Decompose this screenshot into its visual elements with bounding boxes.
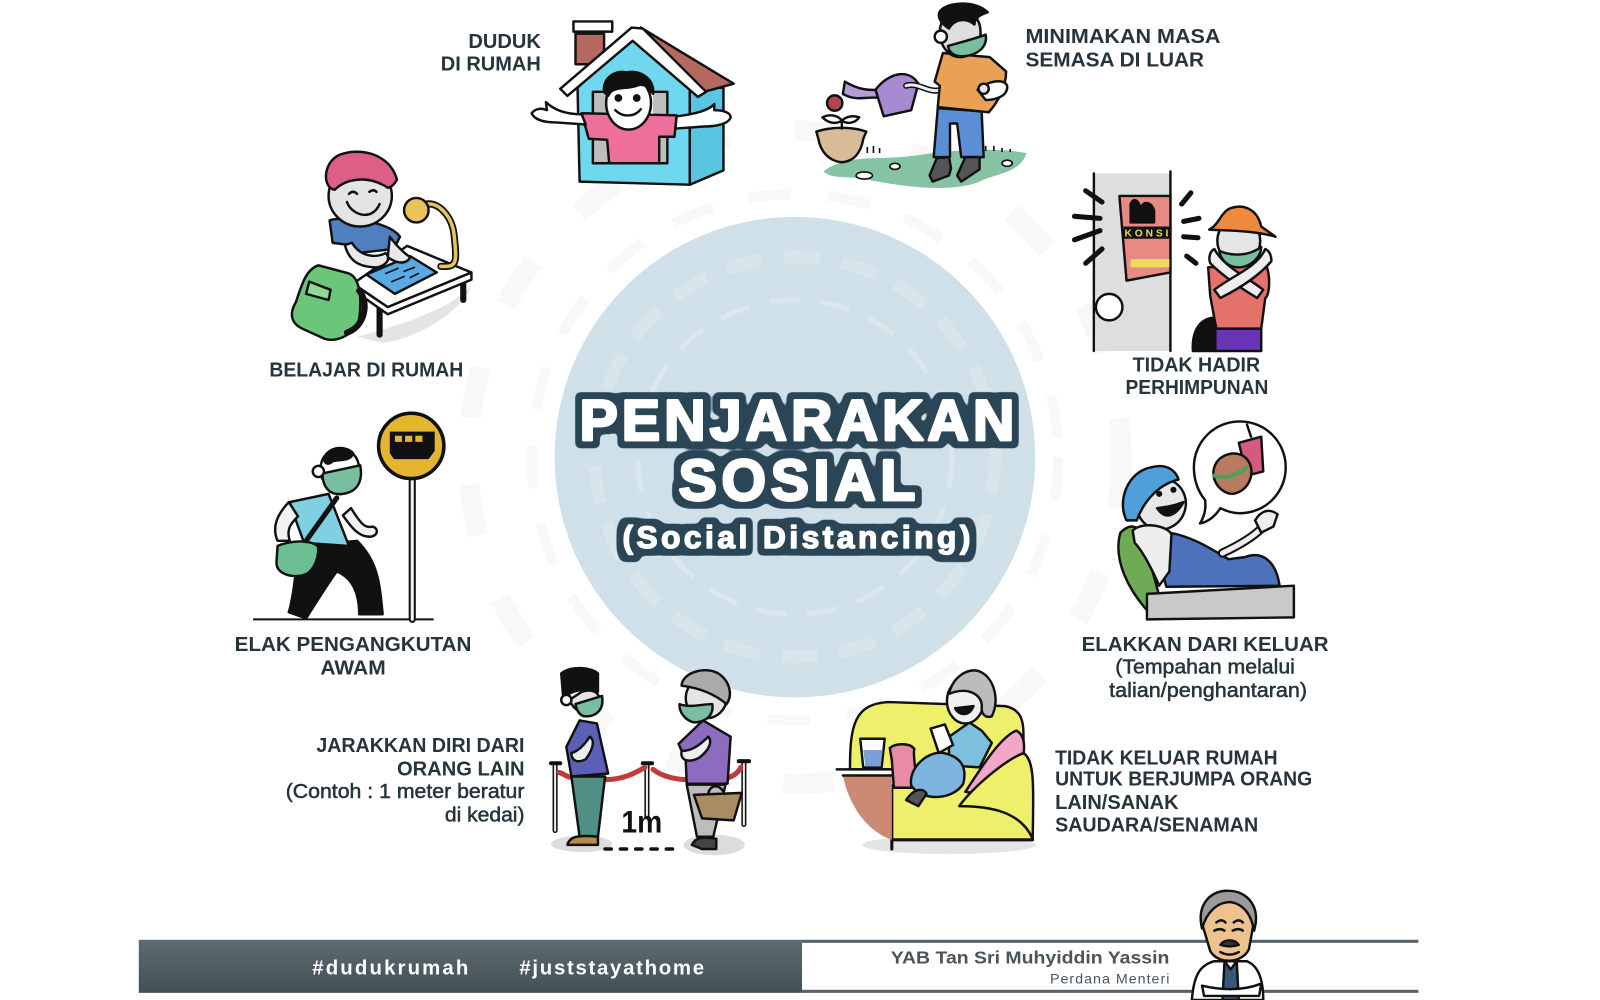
central circle [555,217,1035,697]
label: tidak hadir perhimpunan [1126,354,1268,399]
footer name block: YAB Tan Sri Muhyiddin Yassin [891,947,1169,967]
icon: two people one metre apart in queue [551,668,749,855]
footer bar with hashtags: #juststayathome [519,957,704,979]
label: elakkan dari keluar: ELAKKAN DARI KELUAR [1082,634,1329,656]
background dashed rings [468,131,1121,784]
icon: concert poster and person refusing [1074,171,1276,351]
title [580,389,1014,555]
title: (Social Distancing) [622,519,970,555]
label: minimakan masa semasa di luar [1026,26,1220,71]
label: jarakkan diri dari orang lain: JARAKKAN DIRI DARI [316,735,524,757]
label: elakkan dari keluar [1082,634,1329,702]
icon: prime minister caricature [1192,891,1263,1000]
label: tidak keluar rumah: LAIN/SANAK [1055,792,1179,814]
label: jarakkan diri dari orang lain: ORANG LAIN [397,759,524,781]
label: tidak hadir perhimpunan: PERHIMPUNAN [1126,377,1268,399]
label: elak pengangkutan awam: AWAM [320,657,386,679]
footer bar with hashtags: #dudukrumah [312,957,468,979]
icon: man walking past bus stop [253,413,444,619]
icon: man on couch thinking of food [1118,421,1294,619]
label: belajar di rumah: BELAJAR DI RUMAH [269,360,463,382]
label: tidak keluar rumah [1055,747,1312,837]
label: tidak hadir perhimpunan: TIDAK HADIR [1133,354,1260,376]
icon: house with person [532,21,734,185]
label: duduk di rumah [441,31,541,75]
icon: child studying at desk [292,152,471,343]
title: SOSIAL [679,449,915,513]
label: jarakkan diri dari orang lain [286,735,525,826]
label: jarakkan diri dari orang lain: (Contoh : 1 meter beratur [286,781,525,803]
icon: woman on yellow sofa [837,670,1036,854]
footer bar with hashtags [139,940,802,993]
label: tidak keluar rumah: TIDAK KELUAR RUMAH [1055,747,1278,769]
label: elakkan dari keluar: talian/penghantaran) [1109,680,1307,702]
footer name block: Perdana Menteri [1050,972,1169,988]
icon: two people one metre apart in queue: 1m [621,804,662,840]
label: minimakan masa semasa di luar: SEMASA DI LUAR [1026,49,1204,71]
icon: concert poster and person refusing: KONSI [1124,229,1169,240]
label: duduk di rumah: DI RUMAH [441,53,541,75]
label: jarakkan diri dari orang lain: di kedai) [445,804,524,826]
label: tidak keluar rumah: UNTUK BERJUMPA ORANG [1055,769,1312,791]
label: elakkan dari keluar: (Tempahan melalui [1115,656,1295,678]
footer name block [802,940,1418,993]
title: PENJARAKAN [580,389,1014,453]
label: tidak keluar rumah: SAUDARA/SENAMAN [1055,815,1258,837]
label: minimakan masa semasa di luar: MINIMAKAN MASA [1026,26,1220,48]
icon: man watering plant [816,4,1027,188]
label: elak pengangkutan awam [235,634,471,679]
label: duduk di rumah: DUDUK [468,31,541,53]
label: elak pengangkutan awam: ELAK PENGANGKUTAN [235,634,471,656]
